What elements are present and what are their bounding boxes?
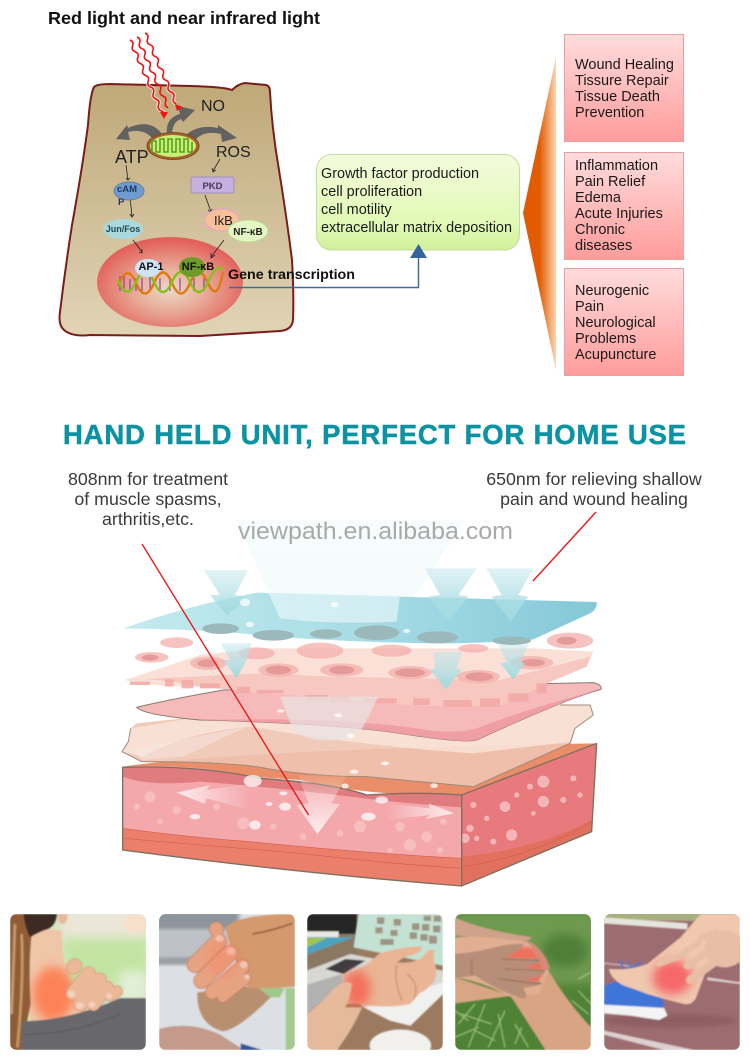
blue top layer bbox=[123, 593, 597, 643]
ROS label: ROS bbox=[216, 144, 251, 161]
NF-kB nucleus bbox=[179, 257, 214, 277]
DNA helix bbox=[118, 268, 223, 294]
cell layer bbox=[125, 633, 593, 707]
title: red light: Red light and near infrared light bbox=[48, 8, 320, 28]
panel: wound healing: Prevention bbox=[575, 105, 644, 121]
Jun/Fos: Jun/Fos bbox=[106, 224, 140, 234]
grey arrows from mitochondrion bbox=[116, 106, 237, 142]
PKD bbox=[191, 177, 234, 193]
panel: inflammation: Acute Injuries bbox=[575, 206, 663, 222]
NF-kB nucleus: NF-κB bbox=[182, 261, 214, 273]
red pointer: 808nm bbox=[142, 544, 308, 815]
dermis block bbox=[123, 743, 597, 886]
skin layers illustration bbox=[122, 520, 601, 886]
arrow 1 bbox=[204, 570, 252, 678]
panel: wound healing: Wound Healing bbox=[575, 57, 674, 73]
panel: wound healing bbox=[564, 34, 684, 142]
panel: neurogenic: Problems bbox=[575, 331, 636, 347]
text: 650nm: pain and wound healing bbox=[500, 489, 688, 509]
beam top bbox=[237, 520, 467, 623]
NO label: NO bbox=[201, 98, 225, 115]
downward arrow in tissue bbox=[297, 775, 347, 834]
panel: inflammation: Chronic bbox=[575, 222, 625, 238]
cell diagram bbox=[60, 33, 293, 336]
side arrows bbox=[177, 783, 454, 820]
mitochondrion bbox=[147, 132, 199, 160]
ATP label: ATP bbox=[115, 147, 149, 167]
panel: neurogenic: Pain bbox=[575, 299, 604, 315]
text: 650nm: 650nm for relieving shallow bbox=[486, 469, 702, 489]
Jun/Fos bbox=[103, 219, 143, 239]
panel: wound healing: Tissure Repair bbox=[575, 73, 669, 89]
center beam lower bbox=[280, 697, 378, 741]
panel: growth factor box bbox=[316, 154, 520, 250]
photo: wrist pain bbox=[307, 914, 443, 1062]
cell body bbox=[60, 83, 293, 336]
blue layer cells bbox=[202, 623, 531, 645]
panel: inflammation: Inflammation bbox=[575, 158, 658, 174]
arrowheads bbox=[160, 104, 183, 119]
epidermis pink layer bbox=[137, 683, 601, 741]
photo: knee pain bbox=[455, 911, 595, 1050]
panel: growth factor box: extracellular matrix deposition bbox=[321, 220, 512, 236]
PKD: PKD bbox=[202, 181, 223, 192]
signalling arrows bbox=[126, 159, 224, 258]
panel: growth factor box: Growth factor production bbox=[321, 166, 479, 182]
text: 650nm bbox=[486, 469, 702, 509]
cAMP: P bbox=[118, 197, 125, 208]
AP-1: AP-1 bbox=[138, 261, 164, 273]
arrow: transcription to growth box bbox=[229, 244, 427, 288]
text: 808nm: arthritis,etc. bbox=[102, 509, 194, 529]
photo: elbow pain bbox=[156, 911, 295, 1050]
panel: inflammation: diseases bbox=[575, 238, 632, 254]
watermark: viewpath.en.alibaba.com bbox=[238, 518, 513, 545]
panel: growth factor box: cell proliferation bbox=[321, 184, 422, 200]
hypodermis layer bbox=[122, 705, 593, 787]
photo: ankle pain bbox=[602, 912, 745, 1050]
NF-kB cytoplasm bbox=[228, 220, 268, 242]
red pointer: 650nm bbox=[533, 512, 596, 581]
orange bracket bbox=[523, 57, 556, 370]
cAMP: cAM bbox=[117, 184, 137, 195]
cAMP bbox=[114, 182, 144, 208]
panel: inflammation bbox=[564, 152, 684, 260]
panel: neurogenic: Neurogenic bbox=[575, 283, 649, 299]
panel: neurogenic: Neurological bbox=[575, 315, 656, 331]
gene transcription label: Gene transcription bbox=[228, 266, 355, 282]
arrow 3 bbox=[487, 568, 533, 679]
panel: neurogenic: Acupuncture bbox=[575, 347, 656, 363]
light rays bbox=[130, 33, 176, 117]
panel: growth factor box: cell motility bbox=[321, 202, 392, 218]
beam over layers bbox=[268, 593, 400, 623]
text: 808nm: of muscle spasms, bbox=[74, 489, 222, 509]
panel: wound healing: Tissue Death bbox=[575, 89, 660, 105]
NF-kB cytoplasm: NF-κB bbox=[233, 227, 263, 238]
nucleus bbox=[97, 237, 243, 327]
IkB bbox=[205, 209, 239, 231]
IkB: IkB bbox=[214, 213, 233, 228]
heading: HAND HELD UNIT, PERFECT FOR HOME USE bbox=[63, 419, 686, 450]
panel: inflammation: Edema bbox=[575, 190, 622, 206]
text: 808nm: 808nm for treatment bbox=[68, 469, 228, 489]
text: 808nm bbox=[68, 469, 228, 529]
AP-1 bbox=[135, 259, 164, 277]
panel: inflammation: Pain Relief bbox=[575, 174, 646, 190]
panel: neurogenic bbox=[564, 268, 684, 376]
arrow 2 bbox=[425, 568, 477, 689]
photo: neck pain bbox=[10, 911, 153, 1050]
water bubbles bbox=[190, 598, 438, 830]
